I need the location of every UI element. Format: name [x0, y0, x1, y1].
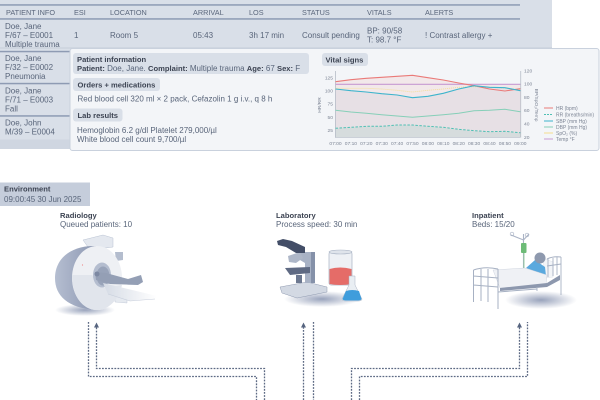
time axis labels: 07:50	[406, 141, 419, 147]
right axis: 20	[524, 135, 530, 141]
arrow: inpatient incoming	[352, 325, 520, 400]
time axis labels: 08:40	[483, 141, 496, 147]
radiology label	[60, 211, 133, 229]
icon: microscope and glassware	[277, 239, 362, 307]
icon: hospital bed with patient	[474, 232, 577, 309]
time axis labels: 07:30	[376, 141, 388, 147]
patient information block	[73, 53, 309, 74]
inpatient label: Inpatient	[472, 211, 504, 220]
vital signs heading	[322, 53, 368, 66]
chart legend: DBP (mm Hg)	[556, 125, 587, 131]
time axis labels: 07:20	[360, 141, 373, 147]
right axis: 100	[524, 82, 532, 88]
table header row: ARRIVAL	[193, 8, 224, 17]
arrow: laboratory incoming	[302, 325, 304, 400]
chart legend: HR (bpm)	[556, 106, 578, 112]
patient row 4	[5, 118, 55, 136]
patient information block: Patient information	[77, 55, 147, 64]
patient row 1: T: 98.7 °F	[367, 36, 401, 44]
time axis labels: 08:50	[499, 141, 511, 147]
left axis	[317, 71, 520, 138]
time axis labels: 09:00	[514, 141, 527, 147]
patient information block: Patient: Doe, Jane. Complaint: Multiple trauma Age: 67 Sex: F	[77, 64, 300, 73]
time axis labels: 08:00	[422, 141, 434, 147]
patient row 1: 05:43	[193, 31, 214, 40]
left axis: 75	[328, 102, 333, 108]
table header row	[6, 8, 453, 17]
orders and medications block: Red blood cell 320 ml × 2 pack, Cefazolin 1 g i.v., q 8 h	[78, 94, 272, 104]
left axis: 100	[325, 88, 333, 94]
patient row 3: Doe, Jane	[5, 86, 42, 96]
table header row: LOS	[249, 8, 264, 17]
chart legend: Temp °F	[556, 137, 575, 143]
patient row 1: 3h 17 min	[249, 31, 284, 40]
table header row: STATUS	[302, 8, 330, 17]
arrow: radiology incoming	[96, 325, 264, 400]
time axis labels: 08:10	[437, 141, 450, 147]
vital signs chart	[317, 68, 594, 147]
orders and medications block	[73, 78, 272, 104]
left axis: HR/RR	[317, 97, 323, 113]
lab results block	[73, 108, 217, 144]
laboratory label: Laboratory	[276, 211, 316, 220]
environment label: Environment	[4, 184, 51, 194]
chart legend: RR (breaths/min)	[556, 112, 594, 118]
patient row 1: Consult pending	[302, 31, 360, 40]
laboratory label: Process speed: 30 min	[276, 220, 357, 229]
arrow: radiology outgoing	[88, 322, 256, 400]
vital signs heading: Vital signs	[326, 56, 363, 64]
time axis labels	[329, 141, 527, 147]
right axis: 120	[524, 68, 532, 74]
temperature line	[336, 83, 520, 85]
patient row 2	[5, 54, 54, 81]
right axis	[521, 68, 539, 141]
RR line	[336, 125, 520, 133]
IV pole	[510, 232, 529, 268]
left axis: 50	[328, 115, 333, 121]
time axis labels: 07:40	[391, 141, 403, 147]
chart legend: SBP (mm Hg)	[556, 119, 587, 125]
table header row: PATIENT INFO	[6, 8, 55, 17]
time axis labels: 08:20	[453, 141, 465, 147]
right axis: 80	[524, 95, 530, 101]
chart legend	[544, 106, 594, 143]
right axis: 60	[524, 108, 530, 114]
time axis labels: 07:10	[345, 141, 357, 147]
patient table panel	[0, 0, 552, 149]
patient detail popup panel	[70, 48, 599, 150]
patient row 4: M/39 – E0004	[5, 128, 55, 136]
patient row 4: Doe, John	[5, 118, 41, 128]
lab results block: Lab results	[78, 111, 118, 120]
table header row: ESI	[74, 8, 86, 17]
left axis: 25	[328, 128, 333, 134]
left axis: 125	[325, 76, 333, 82]
patient row 3: Fall	[5, 104, 18, 114]
table header row: VITALS	[367, 8, 392, 17]
radiology label: Radiology	[60, 211, 97, 220]
patient row 3	[5, 86, 54, 114]
SpO2 line	[336, 87, 520, 92]
patient row 1: BP: 90/58	[367, 26, 403, 36]
patient row 1: Room 5	[110, 31, 139, 40]
orders and medications block: Orders + medications	[78, 80, 155, 90]
inpatient label: Beds: 15/20	[472, 220, 515, 229]
environment label	[0, 182, 90, 206]
lab results block: White blood cell count 9,700/µl	[77, 135, 186, 144]
patient row 1: 1	[74, 31, 79, 40]
patient row 1: Doe, Jane	[5, 22, 42, 31]
lab results block: Hemoglobin 6.2 g/dl Platelet 279,000/µl	[77, 126, 217, 135]
patient row 1: ! Contrast allergy +	[425, 31, 493, 40]
HR line	[336, 75, 520, 91]
patient row 2: F/32 – E0002	[5, 63, 54, 72]
DBP line	[336, 109, 520, 117]
arrow: laboratory outgoing	[312, 322, 314, 400]
arrow: inpatient outgoing	[360, 322, 528, 400]
right axis: 40	[524, 122, 530, 128]
table header row: ALERTS	[425, 8, 453, 17]
icon: MRI scanner	[55, 235, 157, 316]
radiology label: Queued patients: 10	[60, 220, 133, 229]
flow arrows between departments and dashboard	[88, 322, 528, 400]
time axis labels: 07:00	[329, 141, 342, 147]
time axis labels: 08:30	[468, 141, 480, 147]
patient row 1: F/67 – E0001	[5, 31, 54, 40]
laboratory label	[276, 211, 357, 229]
table header row: LOCATION	[110, 8, 147, 17]
patient row 1	[5, 22, 493, 49]
SBP line	[336, 86, 520, 98]
patient row 1: Multiple trauma	[5, 40, 60, 49]
chart legend: SpO₂ (%)	[556, 131, 577, 137]
patient row 3: F/71 – E0003	[5, 96, 54, 104]
inpatient label	[472, 211, 515, 229]
patient row 2: Doe, Jane	[5, 54, 42, 63]
environment label: 09:00:45 30 Jun 2025	[4, 195, 82, 204]
patient row 2: Pneumonia	[5, 72, 46, 81]
right axis: BP/SpO₂/Temp	[533, 89, 539, 122]
